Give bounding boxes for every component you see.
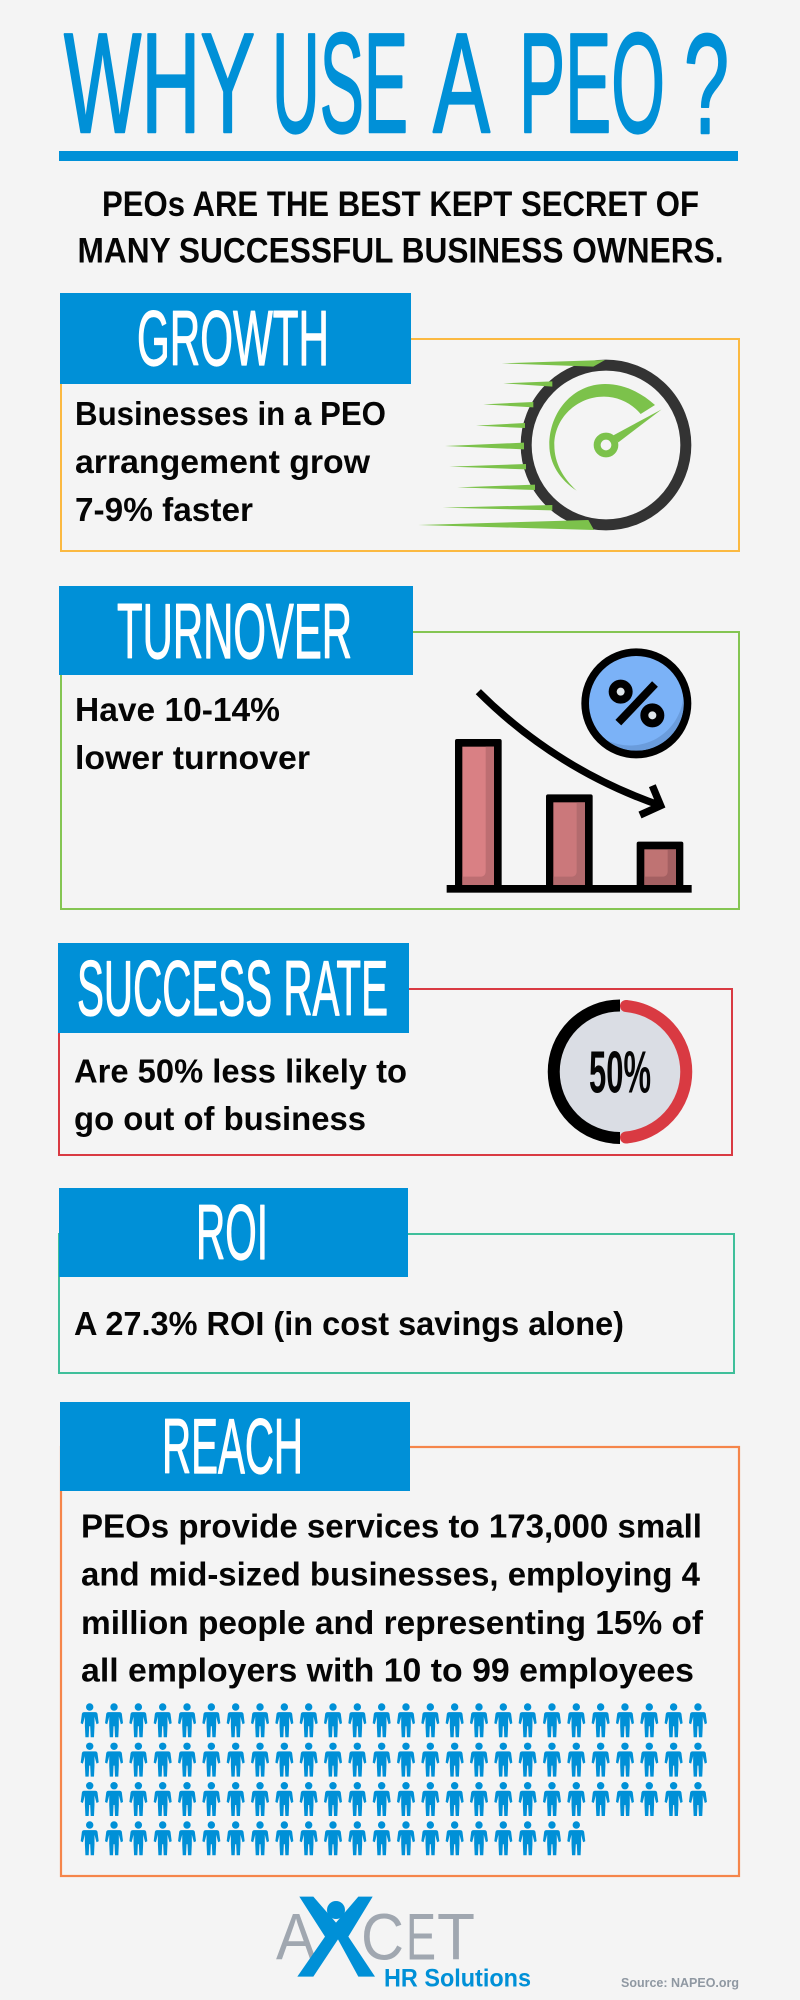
panel: reach bbox=[60, 1402, 739, 1876]
panel: growth bbox=[60, 293, 739, 551]
icon: declining bars with percent bbox=[447, 652, 692, 893]
heading: reach: REACH bbox=[162, 1402, 303, 1490]
subtitle: MANY SUCCESSFUL BUSINESS OWNERS. bbox=[78, 232, 724, 270]
heading: success rate: SUCCESS RATE bbox=[77, 944, 388, 1032]
heading: success rate bbox=[58, 943, 409, 1033]
logo: Axcet HR Solutions: A bbox=[276, 1899, 316, 1973]
text: growth: arrangement grow bbox=[75, 443, 370, 480]
logo: Axcet HR Solutions: T bbox=[437, 1899, 475, 1973]
title: A bbox=[433, 4, 490, 163]
text: turnover: lower turnover bbox=[75, 739, 310, 776]
title: ? bbox=[684, 5, 729, 164]
chart: 50 percent ring: 50% bbox=[589, 1040, 651, 1106]
chart: 50 percent ring bbox=[554, 1000, 686, 1144]
heading: growth bbox=[60, 293, 411, 384]
heading: turnover bbox=[59, 586, 413, 675]
subtitle bbox=[78, 185, 724, 270]
text: reach bbox=[81, 1508, 704, 1689]
text: ROI: A 27.3% ROI (in cost savings alone) bbox=[74, 1305, 624, 1342]
source note: Source: NAPEO.org bbox=[621, 1975, 739, 1990]
text: reach: all employers with 10 to 99 employees bbox=[81, 1652, 694, 1689]
logo: Axcet HR Solutions: C bbox=[361, 1899, 404, 1973]
panel: success rate bbox=[58, 943, 732, 1155]
text: growth: Businesses in a PEO bbox=[75, 395, 386, 432]
heading: ROI: ROI bbox=[196, 1188, 268, 1276]
text: success rate: go out of business bbox=[74, 1100, 366, 1137]
text: success rate: Are 50% less likely to bbox=[74, 1052, 407, 1090]
text: turnover: Have 10-14% bbox=[75, 691, 280, 728]
text: turnover bbox=[75, 691, 310, 776]
panel: ROI bbox=[59, 1188, 734, 1373]
logo: Axcet HR Solutions bbox=[276, 1897, 531, 1993]
text: growth bbox=[75, 395, 386, 528]
subtitle: PEOs ARE THE BEST KEPT SECRET OF bbox=[102, 185, 699, 224]
text: reach: and mid-sized businesses, employing 4 bbox=[81, 1556, 701, 1593]
title underline bar bbox=[59, 151, 738, 161]
pictogram: rows of people bbox=[81, 1703, 707, 1855]
text: success rate bbox=[74, 1052, 407, 1137]
heading: reach bbox=[60, 1402, 410, 1491]
title bbox=[64, 4, 729, 164]
title: WHY bbox=[64, 4, 255, 163]
logo: Axcet HR Solutions: E bbox=[406, 1899, 436, 1973]
heading: turnover: TURNOVER bbox=[117, 587, 352, 675]
panel: turnover bbox=[59, 586, 739, 909]
icon: speedometer bbox=[418, 360, 686, 530]
text: reach: million people and representing 15% of bbox=[81, 1604, 704, 1641]
heading: growth: GROWTH bbox=[137, 294, 329, 382]
text: growth: 7-9% faster bbox=[75, 491, 253, 528]
heading: ROI bbox=[59, 1188, 408, 1277]
logo: Axcet HR Solutions: HR Solutions bbox=[384, 1965, 531, 1993]
text: reach: PEOs provide services to 173,000 small bbox=[81, 1508, 702, 1545]
title: USE bbox=[272, 4, 408, 163]
